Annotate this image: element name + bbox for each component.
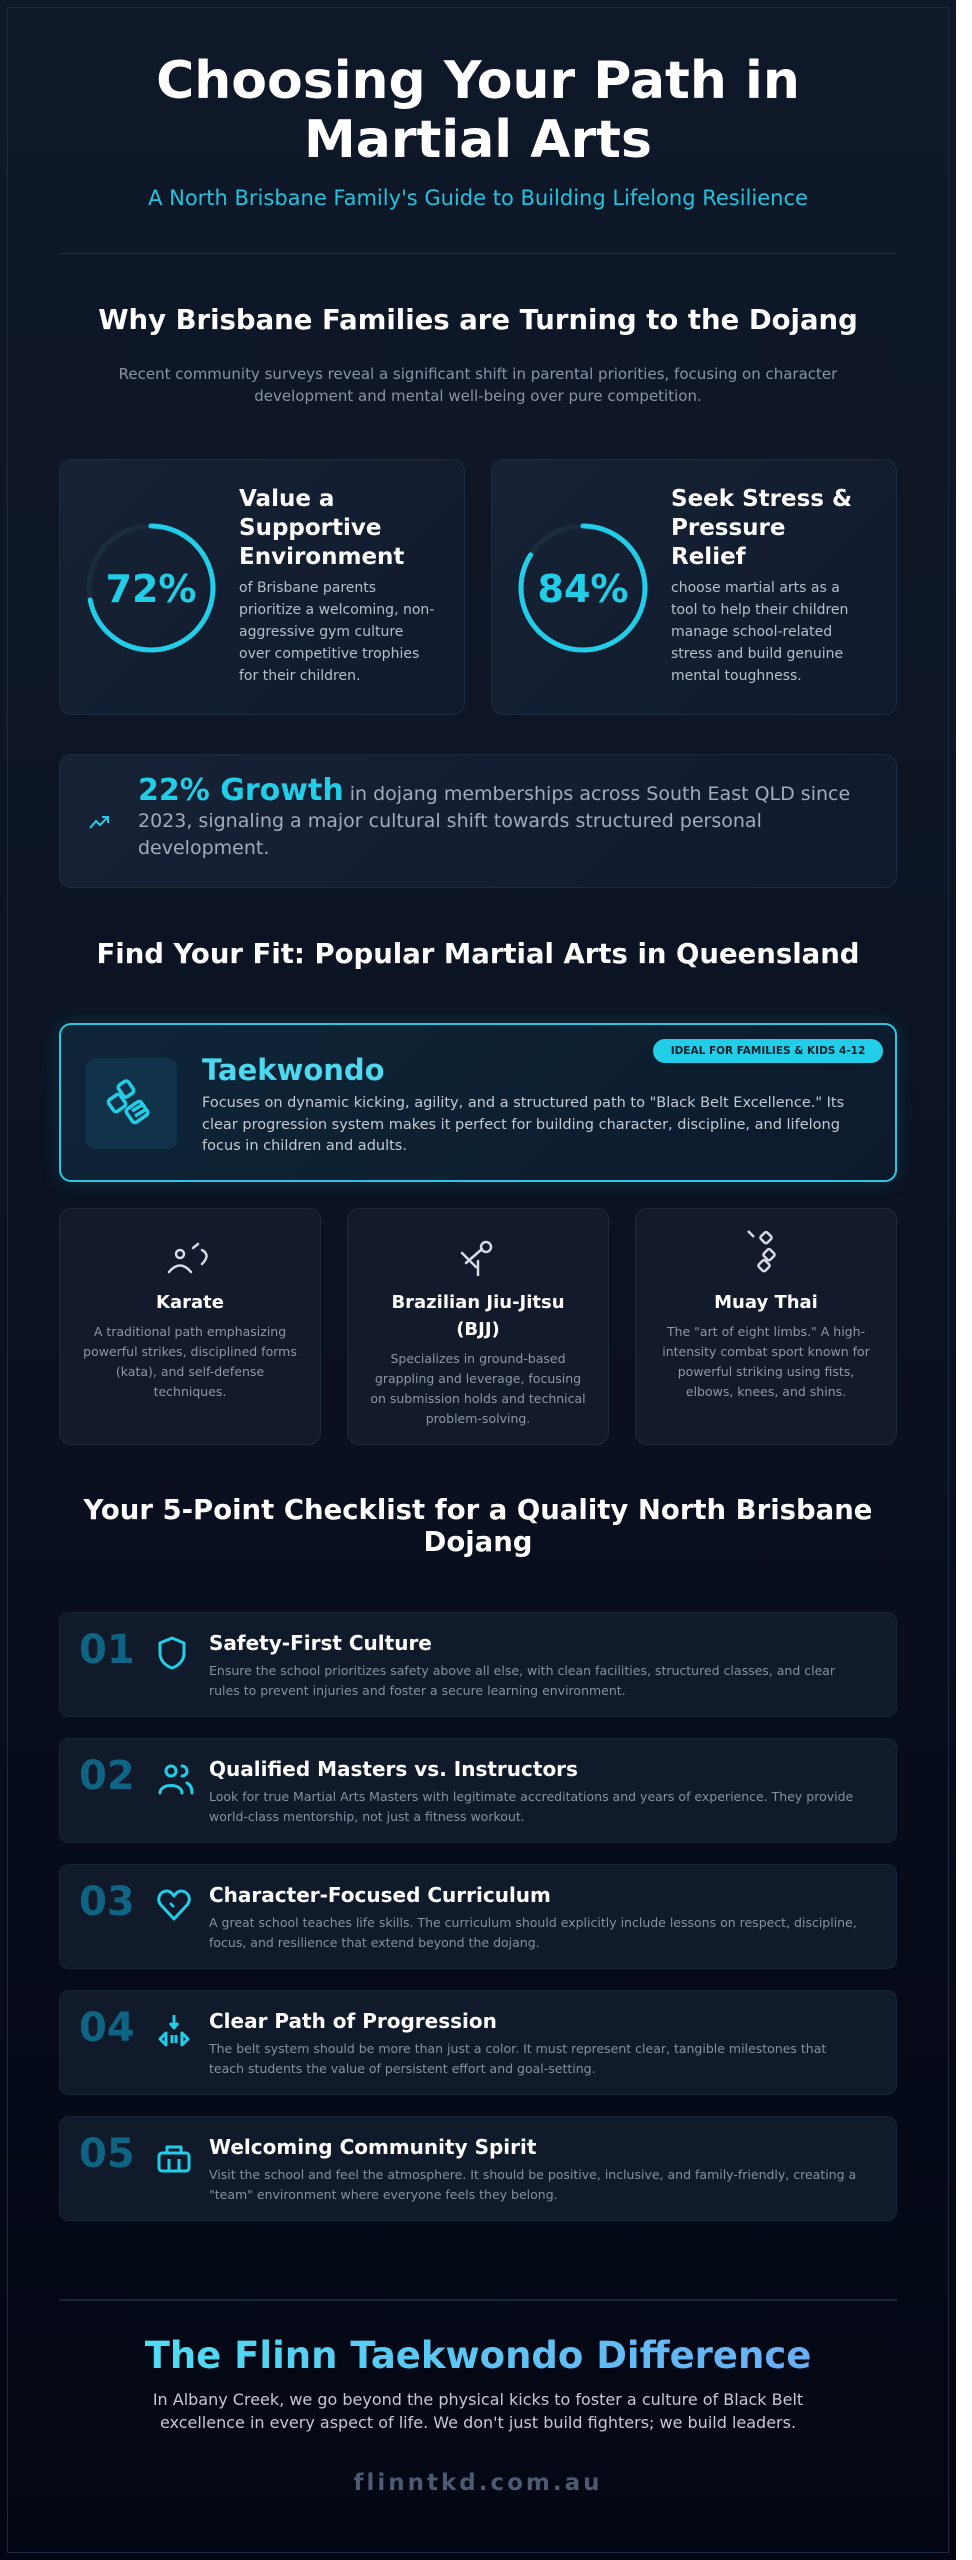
stat text: of Brisbane parents [239,580,376,596]
icon: community [158,2146,190,2172]
icon: progression [158,2015,190,2047]
icon: trend arrow [89,816,109,829]
growth text: 22% Growth in dojang memberships across South East QLD since 2023, signaling a major cultural shift towards structured personal development. [138,773,850,859]
checklist item 02: 02 [79,1753,135,1799]
checklist item 03: Character-Focused Curriculum [209,1883,551,1907]
stat text: tool to help their children [671,602,848,618]
taekwondo text: Taekwondo [202,1053,385,1087]
panel: bjj [347,1208,609,1445]
stat text [671,486,852,684]
panel: karate: A traditional path emphasizing powerful strikes, disciplined forms (kata), and self-defense techniques. [83,1324,297,1399]
checklist item 03: A great school teaches life skills. The curriculum should explicitly include lessons on respect, discipline, focus, and resilience that extend beyond the dojang. [209,1915,857,1950]
panel: bjj: Specializes in ground-based grappling and leverage, focusing on submission holds and technical problem-solving. [370,1351,586,1426]
checklist item 04 [59,1990,897,2095]
checklist item 02 [59,1738,897,1843]
icon: people [158,1764,194,1794]
badge [653,1039,883,1063]
checklist item 05: Visit the school and feel the atmosphere. It should be positive, inclusive, and family-friendly, creating a "team" environment where everyone feels they belong. [209,2167,856,2202]
taekwondo text: Focuses on dynamic kicking, agility, and a structured path to "Black Belt Excellence." Its clear progression system makes it perfect for building character, discipline, and lifelong focus in children and adults. [202,1095,844,1154]
panel: taekwondo [59,1023,897,1182]
title: Choosing Your Path in [156,51,800,111]
checklist item 01: 01 [79,1627,135,1673]
panel: karate: Karate [156,1292,224,1313]
stat card 84% [491,459,897,715]
subtitle: A North Brisbane Family's Guide to Building Lifelong Resilience [148,186,808,210]
taekwondo text [202,1053,844,1154]
checklist item 04: 04 [79,2005,135,2051]
footer text: In Albany Creek, we go beyond the physical kicks to foster a culture of Black Belt excellence in every aspect of life. We don't just build fighters; we build leaders. [153,2390,803,2432]
panel: muay thai [635,1208,897,1445]
stat text: aggressive gym culture [239,624,403,640]
checklist item 01 [59,1612,897,1717]
icon: heart [157,1890,191,1921]
icon: muay thai [747,1230,776,1272]
checklist item 05 [59,2116,897,2221]
icon: bjj [460,1240,492,1276]
icon: taekwondo [86,1058,177,1149]
heading: why families: Why Brisbane Families are Turning to the Dojang [98,304,858,336]
checklist item 02: Qualified Masters vs. Instructors [209,1757,578,1781]
panel: karate [59,1208,321,1445]
icon: shield [158,1636,186,1670]
stat text: prioritize a welcoming, non- [239,602,434,618]
title [156,51,800,170]
checklist item 05: Welcoming Community Spirit [209,2135,536,2159]
footer title: The Flinn Taekwondo Difference [145,2334,811,2377]
ring chart 72% [86,524,216,652]
stat text: choose martial arts as a [671,580,840,596]
panel: muay thai: The "art of eight limbs." A high-intensity combat sport known for powerful striking using fists, elbows, knees, and shins. [662,1324,870,1399]
checklist item 03: 03 [79,1879,135,1925]
stat text: for their children. [239,668,360,684]
stat text: mental toughness. [671,668,802,684]
intro text: Recent community surveys reveal a significant shift in parental priorities, focusing on character development and mental well-being over pure competition. [119,365,837,405]
heading: find your fit: Find Your Fit: Popular Martial Arts in Queensland [96,938,859,970]
stat text: Seek Stress & Pressure Relief [671,486,852,570]
icon: karate [168,1242,208,1274]
checklist item 04: Clear Path of Progression [209,2009,497,2033]
checklist item 02: Look for true Martial Arts Masters with legitimate accreditations and years of experience. They provide world-class mentorship, not just a fitness workout. [209,1789,853,1824]
checklist item 01: Safety-First Culture [209,1631,432,1655]
stat text: stress and build genuine [671,646,843,662]
growth callout [59,754,897,888]
stat text: manage school-related [671,624,832,640]
checklist item 03 [59,1864,897,1969]
ring chart 84% [518,524,648,652]
panel: bjj: (BJJ) [456,1319,500,1340]
ring chart 84%: 84% [538,567,628,611]
panel: muay thai: Muay Thai [714,1292,818,1313]
checklist item 05: 05 [79,2131,135,2177]
title: Martial Arts [304,110,652,170]
badge: IDEAL FOR FAMILIES & KIDS 4-12 [671,1045,865,1057]
stat text: Value a Supportive Environment [239,486,404,570]
ring chart 72%: 72% [106,567,196,611]
stat text [239,486,434,684]
checklist item 01: Ensure the school prioritizes safety above all else, with clean facilities, structured classes, and clear rules to prevent injuries and foster a secure learning environment. [209,1663,835,1698]
checklist item 04: The belt system should be more than just a color. It must represent clear, tangible milestones that teach students the value of persistent effort and goal-setting. [209,2041,826,2076]
panel: bjj: Brazilian Jiu-Jitsu [391,1292,565,1313]
stat card 72% [59,459,465,715]
stat text: over competitive trophies [239,646,419,662]
website url: flinntkd.com.au [353,2470,603,2496]
heading: checklist: Your 5-Point Checklist for a Quality North Brisbane Dojang [84,1494,872,1558]
